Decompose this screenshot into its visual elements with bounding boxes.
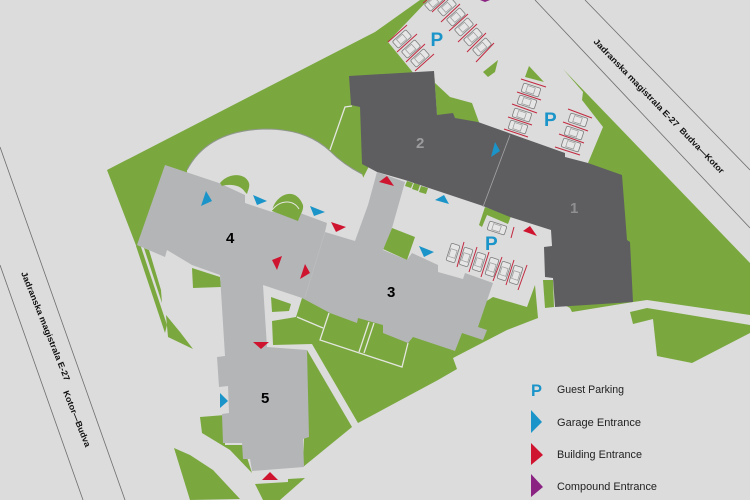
legend: guest parking: P	[531, 382, 542, 400]
building numbers	[226, 135, 578, 407]
parking markers: P	[544, 110, 557, 131]
building numbers: 3	[387, 284, 395, 301]
arch garden 2	[272, 194, 303, 221]
road edges: right highway	[535, 0, 750, 228]
road label: left	[19, 270, 93, 449]
arch garden 1	[220, 175, 249, 194]
legend	[531, 382, 657, 497]
driveway loop	[187, 129, 385, 240]
compound entrance arrow	[480, 0, 490, 2]
driveway loop edge	[187, 129, 362, 174]
legend: garage entrance: Garage Entrance	[557, 417, 641, 429]
road label: left: Jadranska magistrala E-27	[19, 270, 72, 382]
parking markers	[430, 30, 557, 255]
legend: guest parking: Guest Parking	[557, 384, 624, 396]
building joints	[305, 135, 510, 297]
road label: right	[592, 36, 727, 176]
road label: right: Budva—Kotor	[678, 125, 727, 176]
building numbers: 1	[570, 200, 578, 217]
light paths	[297, 106, 408, 367]
parking stall lines	[388, 0, 592, 290]
building 2 and 1	[349, 71, 633, 307]
arch garden path	[272, 202, 299, 210]
legend: guest parking	[531, 382, 624, 400]
parked cars	[392, 0, 588, 285]
legend: building entrance: Building Entrance	[557, 449, 642, 461]
garage entrance arrows	[201, 142, 500, 408]
building numbers: 5	[261, 390, 269, 407]
building entrance arrows	[253, 176, 537, 480]
parking markers: P	[485, 234, 498, 255]
road label: left: Kotor—Budva	[61, 389, 93, 449]
parking markers: P	[430, 30, 444, 51]
building numbers: 2	[416, 135, 424, 152]
road label: right: Jadranska magistrala E-27	[592, 36, 682, 129]
road edges: left highway	[0, 147, 125, 500]
building numbers: 4	[226, 230, 235, 247]
building 3, 4 and 5	[137, 165, 493, 471]
legend: compound entrance: Compound Entrance	[557, 481, 657, 493]
